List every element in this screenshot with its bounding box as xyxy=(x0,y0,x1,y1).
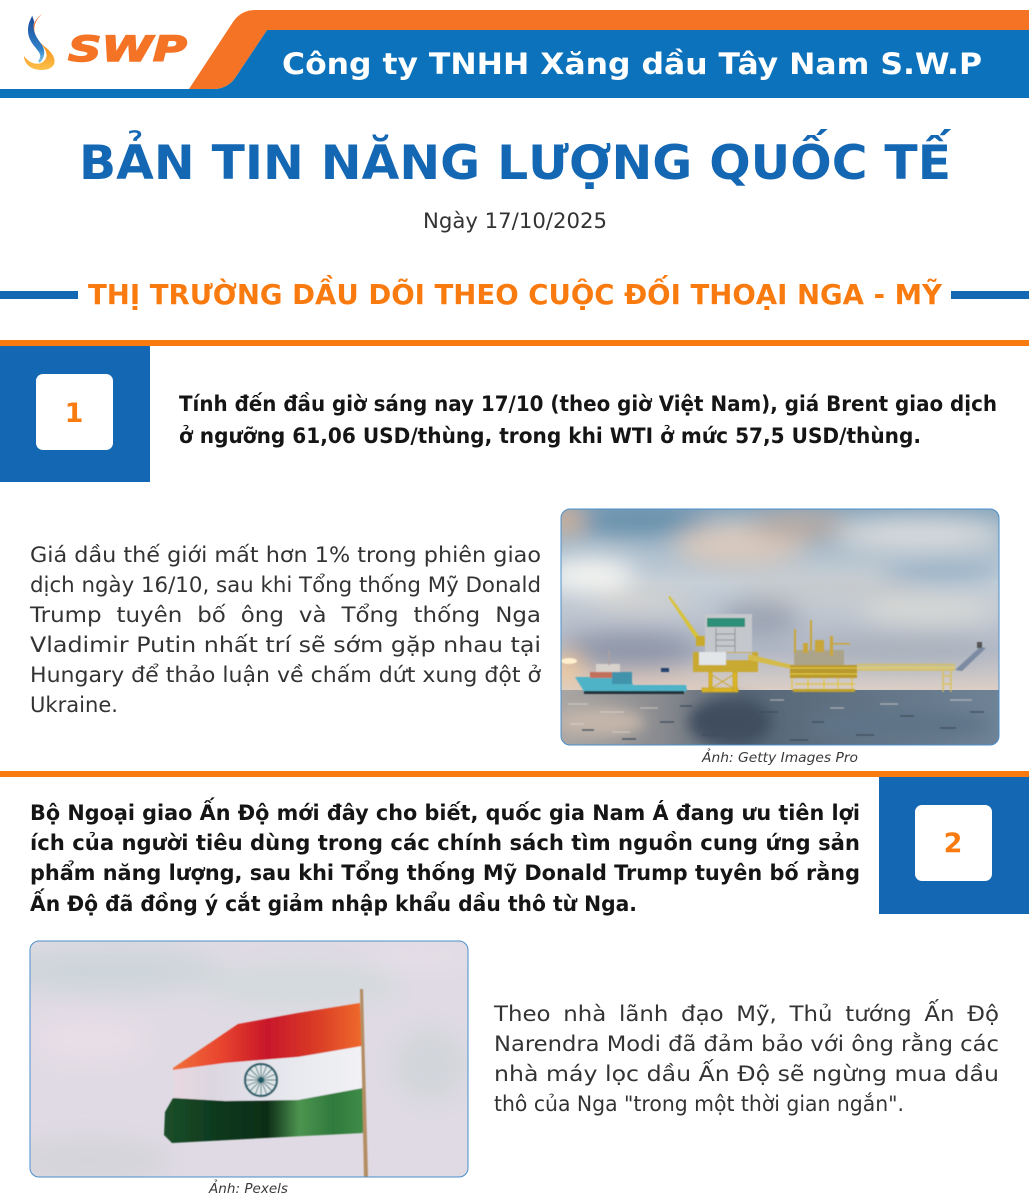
panel: section 2 xyxy=(0,771,1029,1197)
section 1 lead text: ở ngưỡng 61,06 USD/thùng, trong khi WTI ở mức 57,5 USD/thùng. xyxy=(179,424,921,448)
section 2 lead text: ích của người tiêu dùng trong các chính sách tìm nguồn cung ứng sản xyxy=(30,831,860,855)
section 2 lead text xyxy=(30,797,860,916)
section 1 body text: Giá dầu thế giới mất hơn 1% trong phiên giao xyxy=(30,543,541,567)
photo: offshore oil platform xyxy=(545,506,1005,746)
section 2 body text: Theo nhà lãnh đạo Mỹ, Thủ tướng Ấn Độ xyxy=(493,999,999,1026)
section 2 lead text: Ấn Độ đã đồng ý cắt giảm nhập khẩu dầu thô từ Nga. xyxy=(30,888,637,916)
flag stripes xyxy=(173,1003,362,1070)
title: BẢN TIN NĂNG LƯỢNG QUỐC TẾ xyxy=(79,130,952,191)
section 2 lead text: phẩm năng lượng, sau khi Tổng thống Mỹ Donald Trump tuyên bố rằng xyxy=(30,860,860,885)
ship xyxy=(575,677,687,693)
number badge 2 xyxy=(915,805,992,881)
number badge 1 xyxy=(36,374,113,450)
number badge 2: 2 xyxy=(944,828,962,859)
section 1 body text xyxy=(29,543,541,717)
section 2 lead text: Bộ Ngoại giao Ấn Độ mới đây cho biết, quốc gia Nam Á đang ưu tiên lợi xyxy=(30,797,860,825)
logo: SWP xyxy=(24,14,187,70)
section 2 body text: Narendra Modi đã đảm bảo với ông rằng các xyxy=(494,1032,999,1056)
second platform xyxy=(794,650,844,665)
section 2 body text xyxy=(493,999,999,1116)
flag pole xyxy=(360,989,368,1177)
photo caption 2: Ảnh: Pexels xyxy=(208,1179,288,1197)
walkway and flare tower xyxy=(857,664,955,692)
chakra wheel xyxy=(245,1064,277,1096)
bridge xyxy=(748,654,792,669)
section 1 lead text: Tính đến đầu giờ sáng nay 17/10 (theo giờ Việt Nam), giá Brent giao dịch xyxy=(179,392,997,416)
first platform xyxy=(668,596,702,642)
logo: SWP: SWP xyxy=(68,30,187,70)
section 1 body text: Trump tuyên bố ông và Tổng thống Nga xyxy=(29,603,541,627)
section 1 lead text xyxy=(179,392,997,448)
panel: section 1 xyxy=(0,340,1029,766)
header banner xyxy=(0,10,1029,98)
sea waves xyxy=(568,700,984,740)
date: Ngày 17/10/2025 xyxy=(423,209,607,233)
photo: India flag xyxy=(0,941,470,1180)
company name: Công ty TNHH Xăng dầu Tây Nam S.W.P xyxy=(282,47,982,81)
section 1 body text: dịch ngày 16/10, sau khi Tổng thống Mỹ Donald xyxy=(30,573,541,597)
section 1 body text: Vladimir Putin nhất trí sẽ sớm gặp nhau tại xyxy=(30,633,541,657)
section 2 body text: nhà máy lọc dầu Ấn Độ sẽ ngừng mua dầu xyxy=(494,1059,999,1086)
photo caption 1: Ảnh: Getty Images Pro xyxy=(701,748,858,766)
section 2 body text: thô của Nga "trong một thời gian ngắn". xyxy=(494,1092,904,1116)
section 1 body text: Ukraine. xyxy=(30,693,118,717)
subtitle: THỊ TRƯỜNG DẦU DÕI THEO CUỘC ĐỐI THOẠI NGA - MỸ xyxy=(88,273,943,311)
number badge 1: 1 xyxy=(65,398,83,429)
section 1 body text: Hungary để thảo luận về chấm dứt xung đột ở xyxy=(30,663,541,687)
